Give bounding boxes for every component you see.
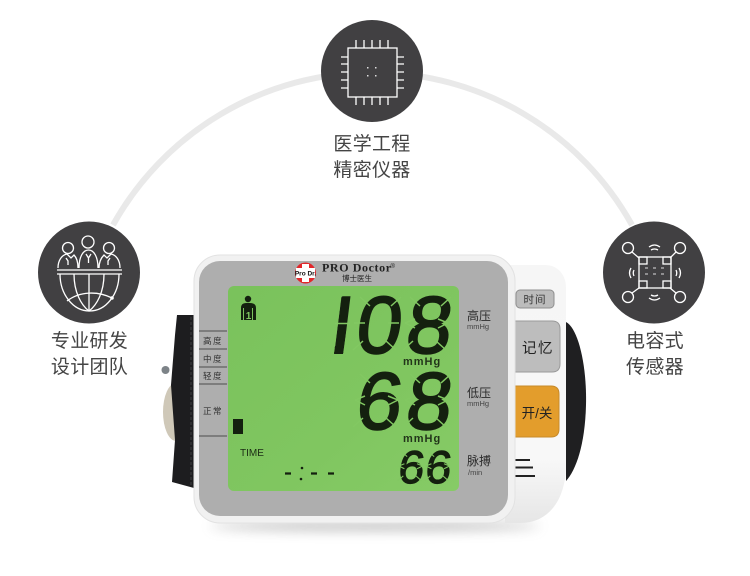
- device shadow: [210, 522, 540, 530]
- brand logo: PRO Doctor: [322, 260, 392, 274]
- user icon: 1: [246, 311, 252, 322]
- clock readout: [285, 472, 334, 475]
- severity scale tabs: [199, 331, 227, 436]
- heading: capacitive sensor: 电容式: [626, 330, 684, 352]
- diastolic reading: 8: [402, 356, 458, 447]
- right wrist strap: [566, 322, 586, 481]
- pulse reading: [396, 441, 455, 493]
- brand logo: 博士医生: [342, 273, 372, 283]
- button: memory: 记忆: [522, 340, 554, 357]
- brand logo: Pro Dr.: [295, 270, 316, 278]
- label: pulse: 脉搏: [467, 453, 491, 468]
- systolic reading: [334, 296, 450, 355]
- heading: R&D team: [51, 330, 128, 378]
- button: power: [515, 386, 559, 437]
- unit: mmHg: mmHg: [403, 356, 441, 368]
- label: systolic: 高压: [467, 308, 491, 323]
- left wrist strap and dial: [162, 315, 194, 488]
- severity scale tabs: 轻度: [203, 371, 223, 381]
- severity scale tabs: 正常: [203, 406, 223, 416]
- button: time: 时间: [524, 293, 546, 306]
- connecting arc: [113, 72, 632, 225]
- brand logo: ®: [390, 263, 396, 270]
- monitor front shell: [194, 255, 515, 523]
- LCD segment cuts: [335, 297, 451, 481]
- label: pulse: [467, 453, 491, 477]
- diastolic reading: [352, 356, 458, 447]
- heading: R&D team: 设计团队: [51, 356, 128, 378]
- button: memory: [515, 321, 560, 372]
- LCD screen: [228, 286, 459, 491]
- unit: mmHg: mmHg: [403, 433, 441, 445]
- systolic reading: 0: [352, 280, 408, 371]
- pulse reading: 6: [396, 441, 428, 493]
- severity scale tabs: 中度: [203, 354, 223, 364]
- heading: R&D team: 专业研发: [51, 330, 128, 352]
- cuffing bar: [233, 419, 243, 434]
- label: diastolic: mmHg: [467, 399, 489, 408]
- button: time: [516, 290, 554, 308]
- icon: chip: [321, 20, 423, 122]
- brand logo: [295, 260, 396, 284]
- label: pulse: /min: [468, 468, 482, 477]
- systolic reading: 1: [313, 280, 369, 371]
- button: power: 开/关: [522, 406, 552, 421]
- label: diastolic: 低压: [467, 386, 491, 400]
- user icon: [241, 296, 256, 322]
- clock colon: [300, 467, 303, 480]
- heading: medical engineering: 医学工程: [333, 133, 411, 155]
- speaker slots: [514, 460, 535, 476]
- heading: medical engineering: 精密仪器: [333, 159, 411, 181]
- heading: capacitive sensor: 传感器: [626, 356, 684, 378]
- grey face panel: [199, 261, 508, 516]
- heading: medical engineering: [333, 133, 411, 181]
- icon: team and globe: [38, 222, 140, 324]
- device side body: [505, 265, 566, 523]
- diastolic reading: 6: [352, 356, 408, 447]
- label: diastolic: [467, 386, 491, 408]
- heading: capacitive sensor: [626, 330, 684, 378]
- label: systolic: [467, 308, 491, 331]
- icon: capacitive sensor: [603, 222, 705, 324]
- TIME label: TIME: [240, 448, 264, 459]
- pulse reading: 6: [423, 441, 455, 493]
- systolic reading: 8: [402, 280, 458, 371]
- severity scale tabs: 高度: [203, 336, 223, 346]
- label: systolic: mmHg: [467, 322, 489, 331]
